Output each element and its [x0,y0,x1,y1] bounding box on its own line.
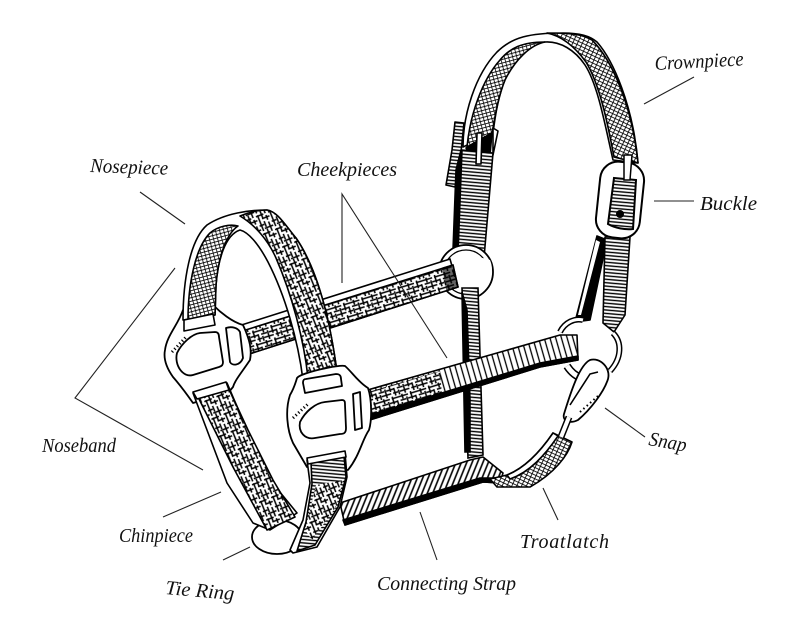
back ring [439,245,493,299]
vertical connecting strap [462,288,483,458]
buckle [594,155,646,240]
front cheek strap [357,320,583,423]
snap [561,359,609,437]
throatlatch [490,433,572,487]
left side plate [165,305,251,403]
label: Chinpiece: Chinpiece [119,525,193,547]
label: Connecting Strap: Connecting Strap [377,573,516,595]
crownpiece strap [463,33,638,163]
leader lines [75,77,694,560]
label: Cheekpieces: Cheekpieces [297,159,397,181]
label: Noseband: Noseband [41,435,117,457]
right cheek strap below buckle [575,236,630,371]
chin ring [252,520,302,554]
label: Troatlatch: Troatlatch [520,531,609,553]
cheekpiece rear strap [232,259,458,356]
chinpiece strap [193,382,297,530]
front side plate [287,366,371,470]
ring plate [453,257,492,292]
nosepiece loop [183,210,337,380]
lower connecting strap [340,457,503,525]
keeper and left cheek buckle strap [446,122,498,258]
front lower strap [290,451,347,553]
label: Snap: Snap [647,428,688,457]
label: Buckle: Buckle [700,193,757,215]
label: Tie Ring: Tie Ring [165,577,235,605]
label: Nosepiece: Nosepiece [89,155,169,180]
label: Crownpiece: Crownpiece [654,48,744,75]
